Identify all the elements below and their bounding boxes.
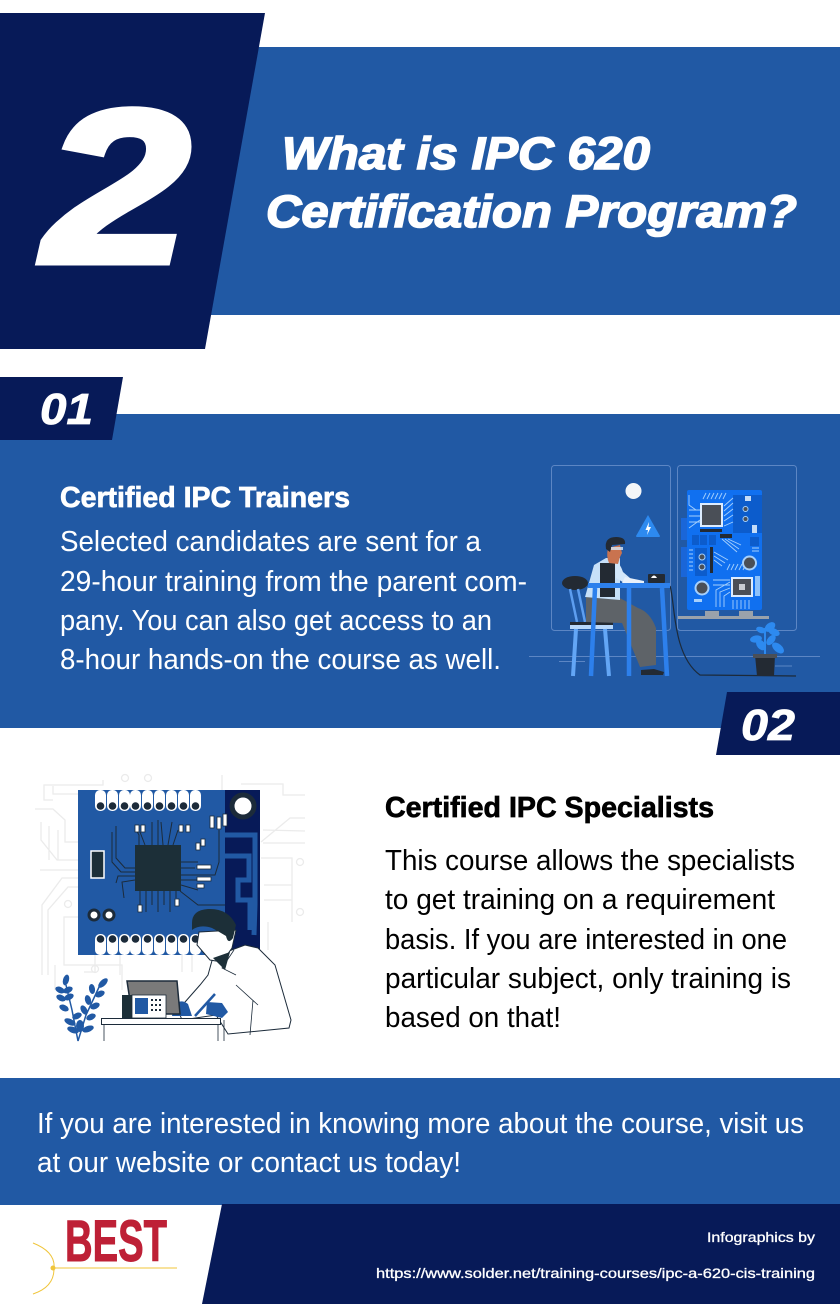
desk: [588, 574, 670, 676]
call to action text: [37, 1108, 804, 1179]
big number 2: 2: [39, 66, 190, 309]
background circuit traces: [35, 775, 305, 990]
workbench: [102, 1018, 224, 1041]
circuit board: [681, 490, 762, 610]
header band: [0, 13, 840, 349]
text block: trainers description: pany. You can also get access to an: [60, 605, 492, 637]
text block: specialists description: basis. If you are interested in one: [385, 924, 787, 956]
icon: wall clock: [626, 483, 642, 499]
text block: trainers description: [60, 526, 527, 676]
icon: warning triangle: [636, 515, 660, 537]
badge: 01: [0, 377, 123, 440]
tester device: [122, 981, 180, 1018]
gloved hands: [206, 1002, 228, 1018]
cable: [670, 586, 796, 676]
circuit board: [78, 790, 260, 955]
icon: potted plant: [749, 620, 786, 676]
small components: [135, 814, 227, 912]
text block: specialists description: This course allows the specialists: [385, 845, 795, 877]
text block: trainers description: 29-hour training from the parent com-: [60, 566, 527, 598]
microchip and traces: [112, 820, 225, 912]
illustration: technician at desk with circuit board: [529, 466, 820, 676]
badge: 01: 01: [40, 385, 93, 434]
footer credit text: https://www.solder.net/training-courses/ipc-a-620-cis-training: [376, 1265, 815, 1281]
engineer: [172, 909, 291, 1035]
top connector pads: [95, 790, 201, 811]
panel: section 01 background: [0, 414, 840, 728]
person seated at desk: [562, 537, 664, 676]
title: Certification Program?: [266, 186, 797, 237]
shelf under board: [678, 611, 769, 619]
logo: BEST: [33, 1209, 177, 1294]
title: What is IPC 620: [282, 128, 650, 179]
text block: specialists description: particular subject, only training is: [385, 963, 791, 995]
text block: specialists description: based on that!: [385, 1002, 561, 1034]
heading: Certified IPC Specialists: Certified IPC Specialists: [385, 792, 714, 824]
panel: call to action band: [0, 1078, 840, 1205]
illustration: engineer soldering with circuit board: [35, 774, 305, 1041]
heading: Certified IPC Trainers: Certified IPC Trainers: [60, 482, 350, 514]
footer credit text: [376, 1229, 815, 1281]
footer credit text: Infographics by: [707, 1229, 815, 1245]
badge: 02: [716, 692, 840, 755]
text block: specialists description: [385, 845, 795, 1034]
badge: 02: 02: [741, 701, 796, 750]
panel: footer credit band: [202, 1204, 840, 1304]
logo: BEST: BEST: [65, 1209, 167, 1274]
text block: specialists description: to get training on a requirement: [385, 884, 775, 916]
text block: trainers description: 8-hour hands-on the course as well.: [60, 644, 501, 676]
bottom connector pads: [95, 934, 201, 955]
call to action text: at our website or contact us today!: [37, 1147, 461, 1179]
icon: plant sprigs: [54, 974, 109, 1041]
call to action text: If you are interested in knowing more about the course, visit us: [37, 1108, 804, 1140]
text block: trainers description: Selected candidates are sent for a: [60, 526, 482, 558]
title: [266, 128, 797, 237]
